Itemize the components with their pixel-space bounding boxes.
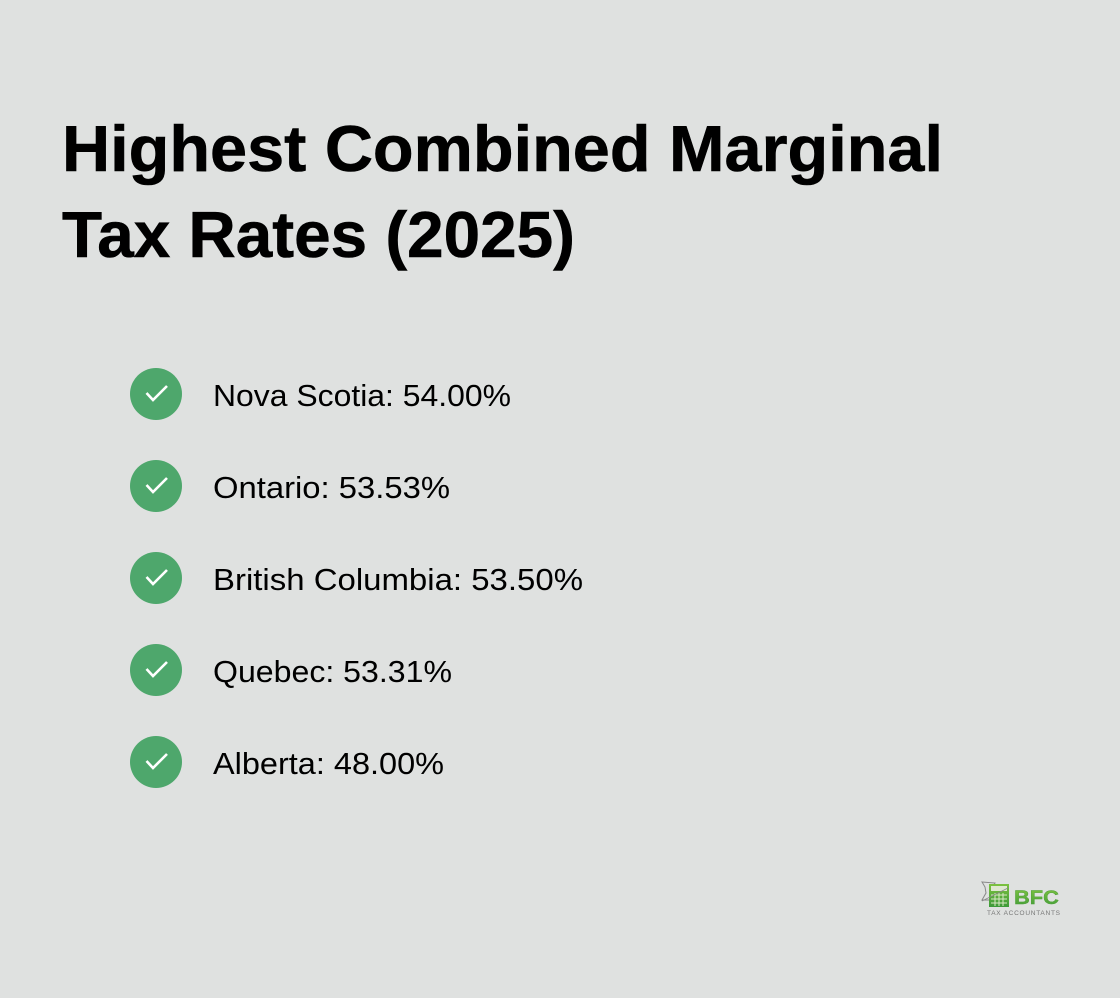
title — [62, 112, 943, 271]
icon: calculator — [982, 882, 1009, 907]
title: Tax Rates (2025) — [62, 198, 575, 271]
list item: Alberta: Alberta: 48.00% — [213, 746, 444, 781]
list item: Alberta — [130, 736, 444, 788]
list item: Nova Scotia — [130, 368, 511, 420]
list of provincial tax rates — [130, 368, 583, 788]
list item: Nova Scotia: Nova Scotia: 54.00% — [213, 378, 511, 413]
list item: Quebec: Quebec: 53.31% — [213, 654, 452, 689]
list item: British Columbia: British Columbia: 53.50% — [213, 562, 583, 597]
list item: British Columbia — [130, 552, 583, 604]
title: Highest Combined Marginal — [62, 112, 943, 185]
logo wordmark: BFC — [1014, 888, 1059, 909]
logo: BFC Tax Accountants — [982, 882, 1061, 917]
logo tagline: TAX ACCOUNTANTS — [987, 910, 1061, 917]
list item: Quebec — [130, 644, 452, 696]
list item: Ontario: Ontario: 53.53% — [213, 470, 450, 505]
list item: Ontario — [130, 460, 450, 512]
